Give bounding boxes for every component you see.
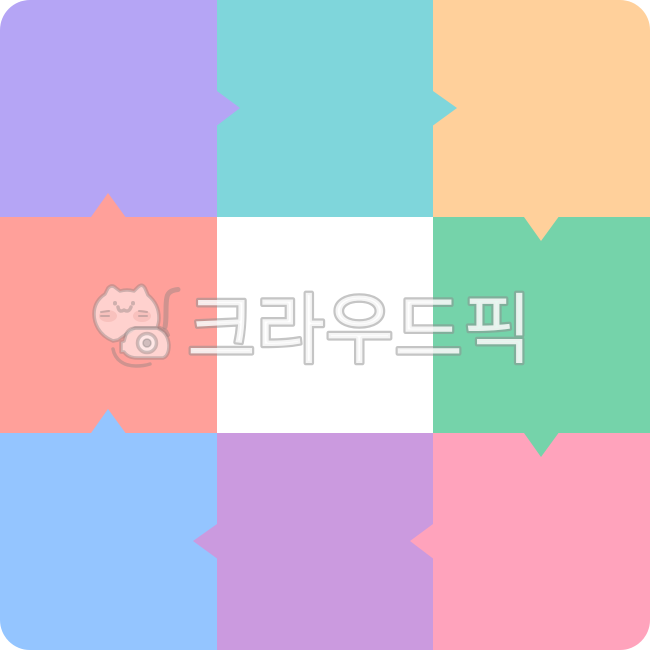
- cat head: [94, 285, 159, 341]
- arrow: red into purple: [91, 193, 126, 218]
- panel: bottom left blue: [0, 433, 217, 650]
- arrow: blue into red: [91, 409, 126, 434]
- camera body: [121, 328, 169, 358]
- arrow: orange into green: [524, 216, 558, 241]
- arrow: teal into orange: [432, 91, 457, 126]
- icon: cat with camera: [94, 285, 178, 366]
- panel: bottom middle violet: [217, 433, 433, 650]
- watermark: [94, 269, 532, 380]
- panel: top right orange: [433, 0, 650, 217]
- panel: middle left red: [0, 217, 217, 433]
- arrow: purple into teal: [216, 91, 240, 126]
- text core: 크라우드픽: [187, 269, 532, 380]
- cat face: [101, 303, 147, 316]
- cat body: [113, 349, 150, 366]
- panel: middle right green: [433, 217, 650, 433]
- watermark text: [187, 269, 532, 380]
- arrow: pink into violet: [410, 524, 434, 558]
- panel: bottom right pink: [433, 433, 650, 650]
- cat cheeks: [99, 310, 151, 322]
- cat tail: [165, 290, 178, 327]
- camera lens center: [143, 339, 151, 347]
- arrow: violet into blue: [193, 524, 218, 558]
- camera lens: [138, 334, 156, 352]
- panel: top middle teal: [217, 0, 433, 217]
- panel: top left purple: [0, 0, 217, 217]
- arrow: green into pink: [524, 432, 558, 457]
- text outline: 크라우드픽: [187, 269, 532, 380]
- camera strap: [160, 328, 168, 335]
- panel: center white: [217, 217, 433, 433]
